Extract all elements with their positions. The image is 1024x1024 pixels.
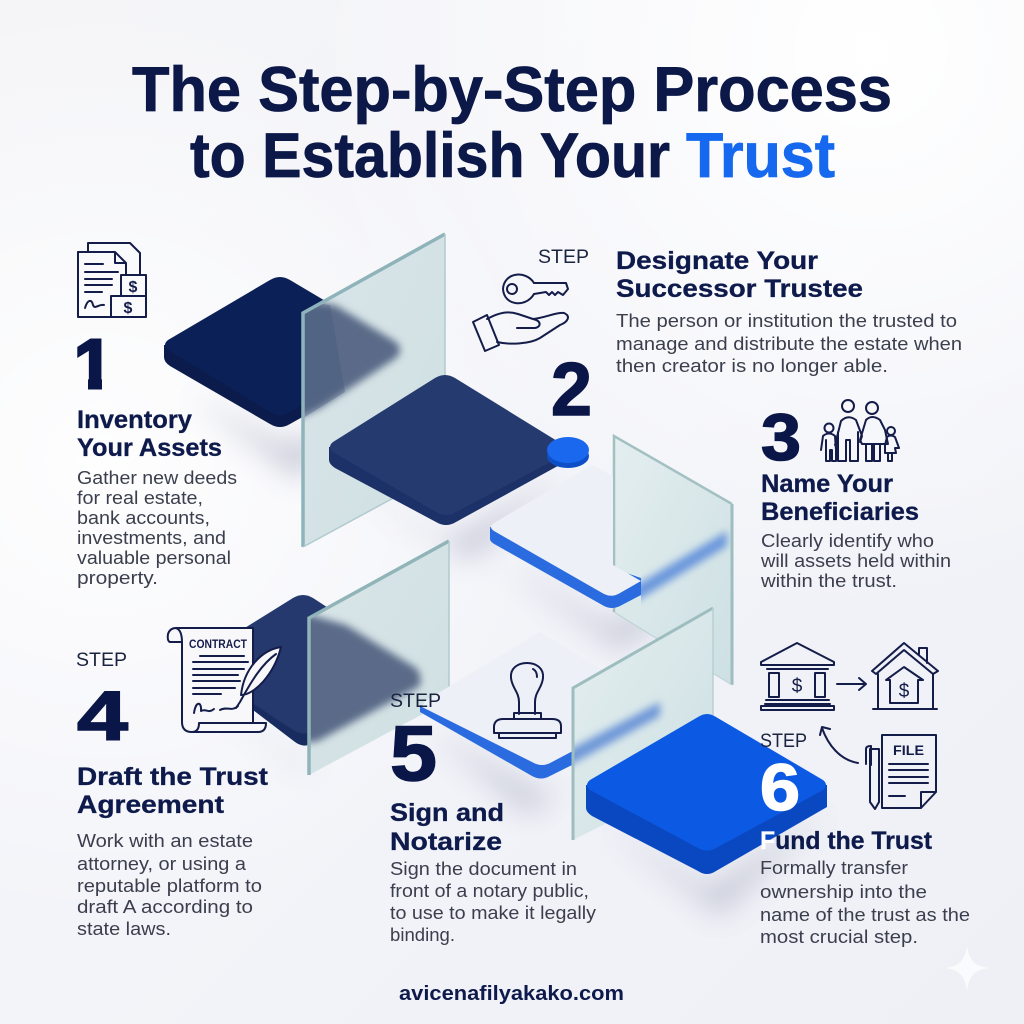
body 3: within the trust. — [760, 571, 897, 591]
icon: bank, house and file flow: FILE — [893, 742, 924, 758]
glass panel 3 with blurred blue edge — [614, 436, 732, 685]
heading 3: Name Your — [761, 470, 893, 498]
platform 1: navy slab — [164, 277, 400, 427]
body 3: Clearly identify who — [761, 531, 934, 551]
heading 3 — [761, 470, 919, 526]
icon: key over hand — [473, 275, 568, 351]
body 1: Gather new deeds — [77, 468, 237, 488]
body 3: will assets held within — [760, 551, 951, 571]
body 3 — [760, 531, 951, 591]
number 5: 5 — [390, 709, 437, 797]
body 6: name of the trust as the — [760, 905, 970, 925]
body 1: valuable personal — [77, 548, 231, 568]
icon: documents and money — [78, 243, 146, 317]
platform 3: white slab with blue edge — [490, 465, 641, 608]
platform 6: bright blue slab — [586, 714, 827, 874]
icon: documents and money: $ — [124, 300, 133, 317]
body 1: bank accounts, — [77, 508, 210, 528]
body 5: Sign the document in — [390, 859, 577, 879]
heading 4: Draft the Trust — [77, 763, 269, 791]
body 6: Formally transfer — [760, 858, 908, 878]
heading 6: Fund the Trust — [760, 827, 933, 855]
body 6: ownership into the — [760, 882, 927, 902]
body 1: property. — [77, 568, 158, 588]
platform 5: white slab with blue edge — [420, 632, 660, 778]
heading 5 — [390, 799, 504, 856]
number 3: 3 — [761, 400, 801, 474]
body 4: reputable platform to — [77, 876, 262, 896]
heading 2: Designate Your — [616, 247, 818, 275]
number 1: 1 — [74, 325, 113, 403]
heading 1 — [77, 406, 222, 462]
body 2: then creator is no longer able. — [616, 356, 888, 376]
icon: sparkle watermark — [945, 946, 989, 991]
platform 4: navy slab — [190, 595, 420, 746]
icon: bank, house and file flow: $ — [899, 681, 910, 702]
body 5: front of a notary public, — [390, 881, 589, 901]
heading 5: Sign and — [390, 799, 504, 827]
heading 1: Your Assets — [77, 434, 222, 462]
step label 5: STEP — [390, 691, 441, 712]
heading 2: Successor Trustee — [616, 275, 863, 303]
step 4 — [76, 628, 281, 939]
step 2 — [473, 247, 962, 431]
heading 1: Inventory — [77, 406, 192, 434]
icon: contract and quill — [168, 628, 281, 732]
body 5: to use to make it legally — [390, 903, 596, 923]
body 4: state laws. — [77, 919, 171, 939]
body 2 — [616, 311, 962, 376]
step label 6: STEP — [760, 731, 807, 752]
title: Trust — [686, 121, 835, 191]
connector dot — [547, 437, 589, 468]
step 1 — [74, 243, 237, 588]
title — [132, 55, 892, 191]
icon: contract and quill: CONTRACT — [189, 639, 247, 651]
heading 3: Beneficiaries — [761, 498, 919, 526]
number 4: 4 — [77, 677, 128, 755]
body 1: investments, and — [77, 528, 226, 548]
step label 4: STEP — [76, 650, 127, 671]
step 5 — [390, 663, 596, 945]
body 2: manage and distribute the estate when — [616, 334, 962, 354]
body 2: The person or institution the trusted to — [616, 311, 957, 331]
number 2: 2 — [551, 347, 592, 431]
heading 5: Notarize — [390, 828, 502, 856]
icon: documents and money: $ — [129, 279, 138, 296]
platform 2: navy slab — [329, 375, 565, 525]
glass panel 5 with blurred blue edge — [565, 608, 713, 840]
glass panel 4 with blurred platform — [300, 541, 449, 775]
drop shadows under platforms — [190, 395, 825, 915]
body 4: Work with an estate — [77, 831, 253, 851]
body 5: binding. — [390, 925, 455, 945]
heading 4: Agreement — [77, 791, 225, 819]
heading 2 — [616, 247, 863, 303]
body 4: draft A according to — [77, 897, 253, 917]
icon: family — [821, 400, 899, 461]
title: The Step-by-Step Process — [132, 55, 892, 125]
icon: bank, house and file flow: $ — [792, 676, 803, 697]
number 6: 6 — [760, 750, 800, 824]
body 6 — [760, 858, 970, 947]
body 1: for real estate, — [77, 488, 203, 508]
body 6: most crucial step. — [760, 927, 918, 947]
icon: stamp — [494, 663, 561, 738]
icon: bank, house and file flow — [761, 643, 938, 809]
body 5 — [390, 859, 596, 945]
heading 4 — [77, 763, 269, 819]
step 6 — [760, 643, 970, 947]
glass panel 1 with blurred platform — [295, 234, 445, 547]
footer website: avicenafilyakako.com — [399, 983, 624, 1005]
step 3 — [760, 400, 951, 591]
body 4 — [77, 831, 262, 939]
title: to Establish Your — [190, 121, 670, 191]
step label 2: STEP — [538, 247, 589, 268]
body 1 — [77, 468, 237, 588]
body 4: attorney, or using a — [77, 854, 247, 874]
